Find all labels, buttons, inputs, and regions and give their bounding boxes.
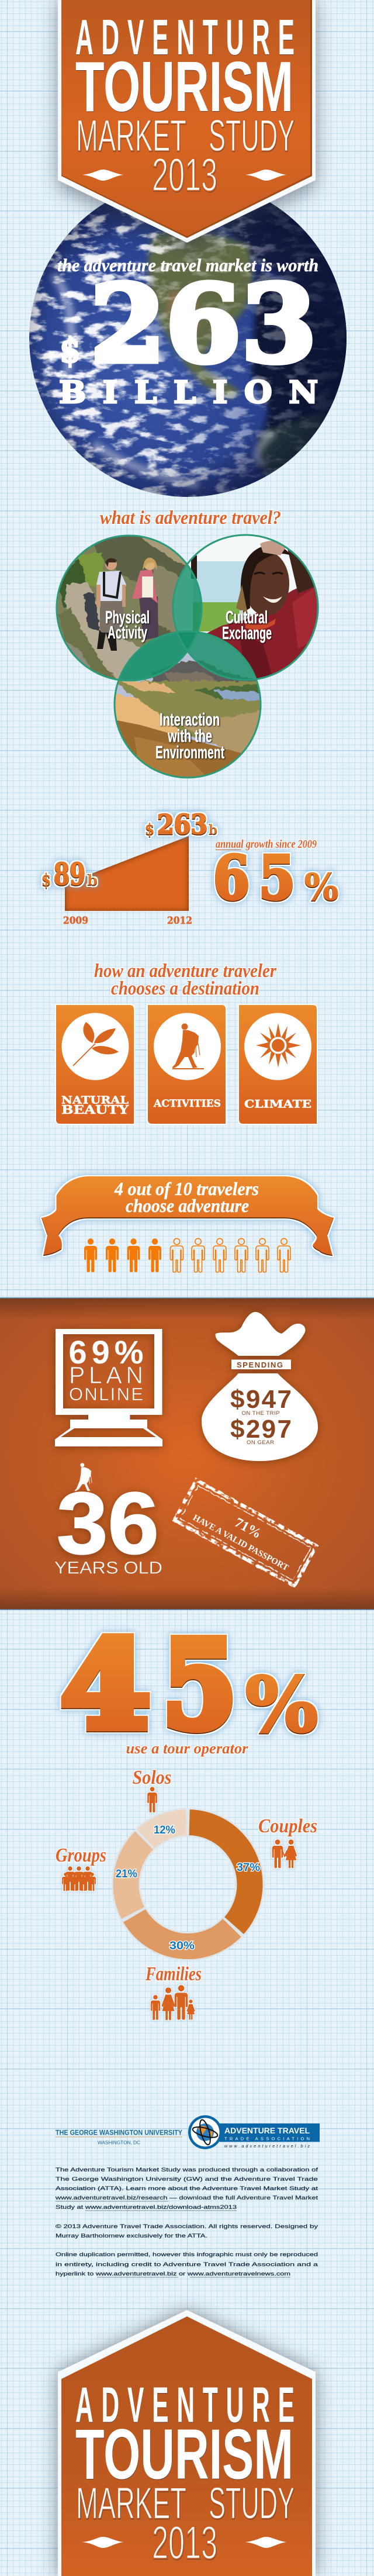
venn labels: Exchange: [222, 623, 272, 643]
year labels: 2012: [167, 915, 192, 927]
bottom ornaments: [82, 2537, 286, 2548]
card: climate: [238, 1004, 317, 1124]
segment labels: Groups: [56, 1845, 106, 1866]
value 89b: b: [87, 872, 98, 890]
credits text: www.adventuretravel.biz/research — download the full Adventure Travel Market: [55, 2195, 318, 2201]
billion: BILLION: [59, 374, 318, 410]
icon: monitor with 69% plan online: PLAN: [69, 1362, 143, 1389]
photo circle: interaction with the environment: [116, 633, 259, 776]
icon: money bag with spending: $947: [230, 1385, 292, 1414]
65 percent: 6: [213, 843, 250, 914]
logo: adventure travel trade association: [188, 2115, 320, 2149]
area polygon: [65, 836, 189, 911]
icon: couple: [272, 1839, 297, 1868]
venn labels: [105, 607, 272, 762]
growth chart: [41, 809, 338, 927]
venn labels: Activity: [108, 622, 147, 643]
year labels: 2009: [63, 915, 88, 927]
label: [61, 1094, 129, 1117]
bottom title: market study: STUDY: [209, 2479, 295, 2528]
people pictogram: 4 of 10: [84, 1238, 290, 1272]
overlap tints: [120, 566, 255, 679]
dollar sign: $: [60, 330, 81, 370]
heading: what is adventure travel: what is adventure travel?: [100, 507, 281, 529]
credits text: Study at www.adventuretravel.biz/download-atms2013: [56, 2204, 237, 2211]
earth market value text: [57, 255, 318, 410]
card: activities: [147, 1004, 226, 1124]
263 value: 263: [90, 261, 317, 386]
icon: leaf: [73, 1022, 119, 1066]
label: CLIMATE: [244, 1098, 311, 1111]
annual growth caption: annual growth since 2009: [216, 838, 317, 851]
label: ACTIVITIES: [153, 1098, 221, 1109]
logo: adventure travel trade association: www.adventuretravel.biz: [224, 2145, 310, 2149]
bottom title: year: 2013: [152, 2516, 217, 2568]
passport stamp: 71%: [232, 1515, 264, 1542]
photo circle: cultural exchange: [174, 536, 317, 678]
logo: adventure travel trade association: ADVENTURE TRAVEL: [224, 2126, 310, 2135]
logo: george washington university: WASHINGTON, DC: [98, 2140, 140, 2146]
title: adventure: ADVENTURE: [75, 10, 295, 65]
65 percent: %: [304, 866, 338, 910]
icon: solo traveler: [147, 1787, 157, 1812]
credits text: hyperlink to www.adventuretravel.biz or www.adventuretravelnews.com: [56, 2271, 290, 2277]
title banner top: [58, 0, 316, 250]
intro line: the adventure travel market is worth: [57, 255, 318, 275]
icon: monitor with 69% plan online: [55, 1329, 162, 1446]
bottom title: adventure: ADVENTURE: [75, 2378, 295, 2433]
credits text: The George Washington University (GW) and the Adventure Travel Trade: [56, 2176, 318, 2183]
ribbon text: choose adventure: [126, 1195, 249, 1216]
icon: money bag with spending: ON GEAR: [247, 1439, 274, 1446]
title: market study: MARKET: [76, 111, 186, 161]
value 263b: b: [209, 821, 217, 838]
venn labels: Environment: [155, 742, 224, 762]
donut percent labels: 12%: [154, 1824, 175, 1836]
heading: how an adventure traveler chooses a destination: [94, 961, 277, 999]
orange band panel: [0, 1297, 374, 1610]
venn labels: Interaction: [160, 709, 220, 730]
circle outlines: [57, 535, 318, 778]
ribbon: 4 out of 10 travelers: [41, 1176, 334, 1256]
icon: monitor with 69% plan online: 69%: [69, 1334, 144, 1370]
title: year: 2013: [152, 149, 217, 201]
credits text: © 2013 Adventure Travel Trade Association. All rights reserved. Designed by: [56, 2223, 318, 2230]
segment labels: Solos: [132, 1767, 172, 1788]
stat: 36 years old: 36: [57, 1474, 159, 1572]
value 89b: 89: [54, 857, 85, 893]
credits text: [55, 2167, 318, 2277]
value 263b: 263: [157, 809, 207, 841]
credits text: Murray Bartholomew exclusively for the ATTA.: [56, 2233, 207, 2239]
bottom title: market study: MARKET: [76, 2479, 186, 2528]
ornaments: [82, 170, 286, 181]
ribbon text: 4 out of 10 travelers: [114, 1178, 259, 1199]
caption: use a tour operator: use a tour operator: [126, 1740, 248, 1757]
icon: small hiker: [74, 1463, 92, 1491]
icon: group: [62, 1866, 96, 1891]
segment labels: Families: [145, 1963, 202, 1985]
venn labels: Cultural: [226, 607, 268, 627]
icon: money bag with spending: SPENDING: [237, 1360, 283, 1369]
icon: sun: [256, 1023, 301, 1068]
icon: money bag with spending: $297: [230, 1415, 292, 1444]
label: NATURAL: [61, 1094, 129, 1106]
segment labels: [56, 1767, 317, 1985]
credits text: in entirety, including credit to Adventure Travel Trade Association and a: [56, 2261, 318, 2268]
donut percent labels: 21%: [116, 1868, 137, 1880]
logo: george washington university: THE GEORGE WASHINGTON UNIVERSITY: [56, 2129, 182, 2136]
icon: monitor with 69% plan online: ONLINE: [69, 1384, 143, 1404]
photo circle: physical activity: [57, 537, 186, 679]
65 percent: 5: [259, 843, 295, 914]
stat: 45 percent: [61, 1614, 318, 1756]
year labels: [63, 915, 192, 927]
segment labels: Couples: [258, 1815, 317, 1837]
icon: money bag with spending: [202, 1312, 318, 1461]
credits text: Association (ATTA). Learn more about the Adventure Travel Market Study at: [56, 2185, 318, 2192]
venn diagram: [53, 532, 321, 781]
title: market study: STUDY: [209, 111, 295, 161]
stat: 45 percent: 5: [162, 1614, 237, 1756]
stat: 36 years old: YEARS OLD: [54, 1559, 162, 1577]
stat: 45 percent: 4: [61, 1614, 150, 1756]
stat: 45 percent: %: [245, 1660, 318, 1750]
icon: hiker: [172, 1023, 204, 1069]
heading: how an adventure traveler chooses a destination: chooses a destination: [111, 978, 259, 999]
passport stamp: [175, 1480, 316, 1586]
ribbon text: [114, 1178, 259, 1216]
value 263b: $: [145, 821, 154, 839]
venn labels: with the: [167, 726, 212, 746]
credits text: The Adventure Tourism Market Study was produced through a collaboration of: [56, 2167, 318, 2173]
logo: adventure travel trade association: TRADE ASSOCIATION: [224, 2136, 310, 2141]
card: natural beauty: [56, 1004, 134, 1124]
icon: money bag with spending: ON THE TRIP: [242, 1410, 279, 1417]
65 percent: [213, 843, 338, 914]
donut percent labels: 30%: [169, 1940, 195, 1952]
icon: family: [151, 1985, 195, 2020]
donut percent labels: [116, 1824, 260, 1952]
donut chart: [116, 1822, 260, 1952]
earth globe: [29, 179, 351, 498]
label: BEAUTY: [61, 1103, 129, 1117]
passport stamp: HAVE A VALID PASSPORT: [191, 1513, 290, 1573]
credits text: Online duplication permitted, however this infographic must only be reproduced: [56, 2252, 318, 2258]
venn labels: Physical: [105, 607, 150, 627]
value 89b: $: [41, 871, 51, 891]
donut percent labels: 37%: [237, 1862, 260, 1874]
title banner bottom: [58, 2310, 316, 2576]
logo: george washington university: [56, 2129, 182, 2146]
heading: how an adventure traveler chooses a destination: how an adventure traveler: [94, 961, 277, 982]
